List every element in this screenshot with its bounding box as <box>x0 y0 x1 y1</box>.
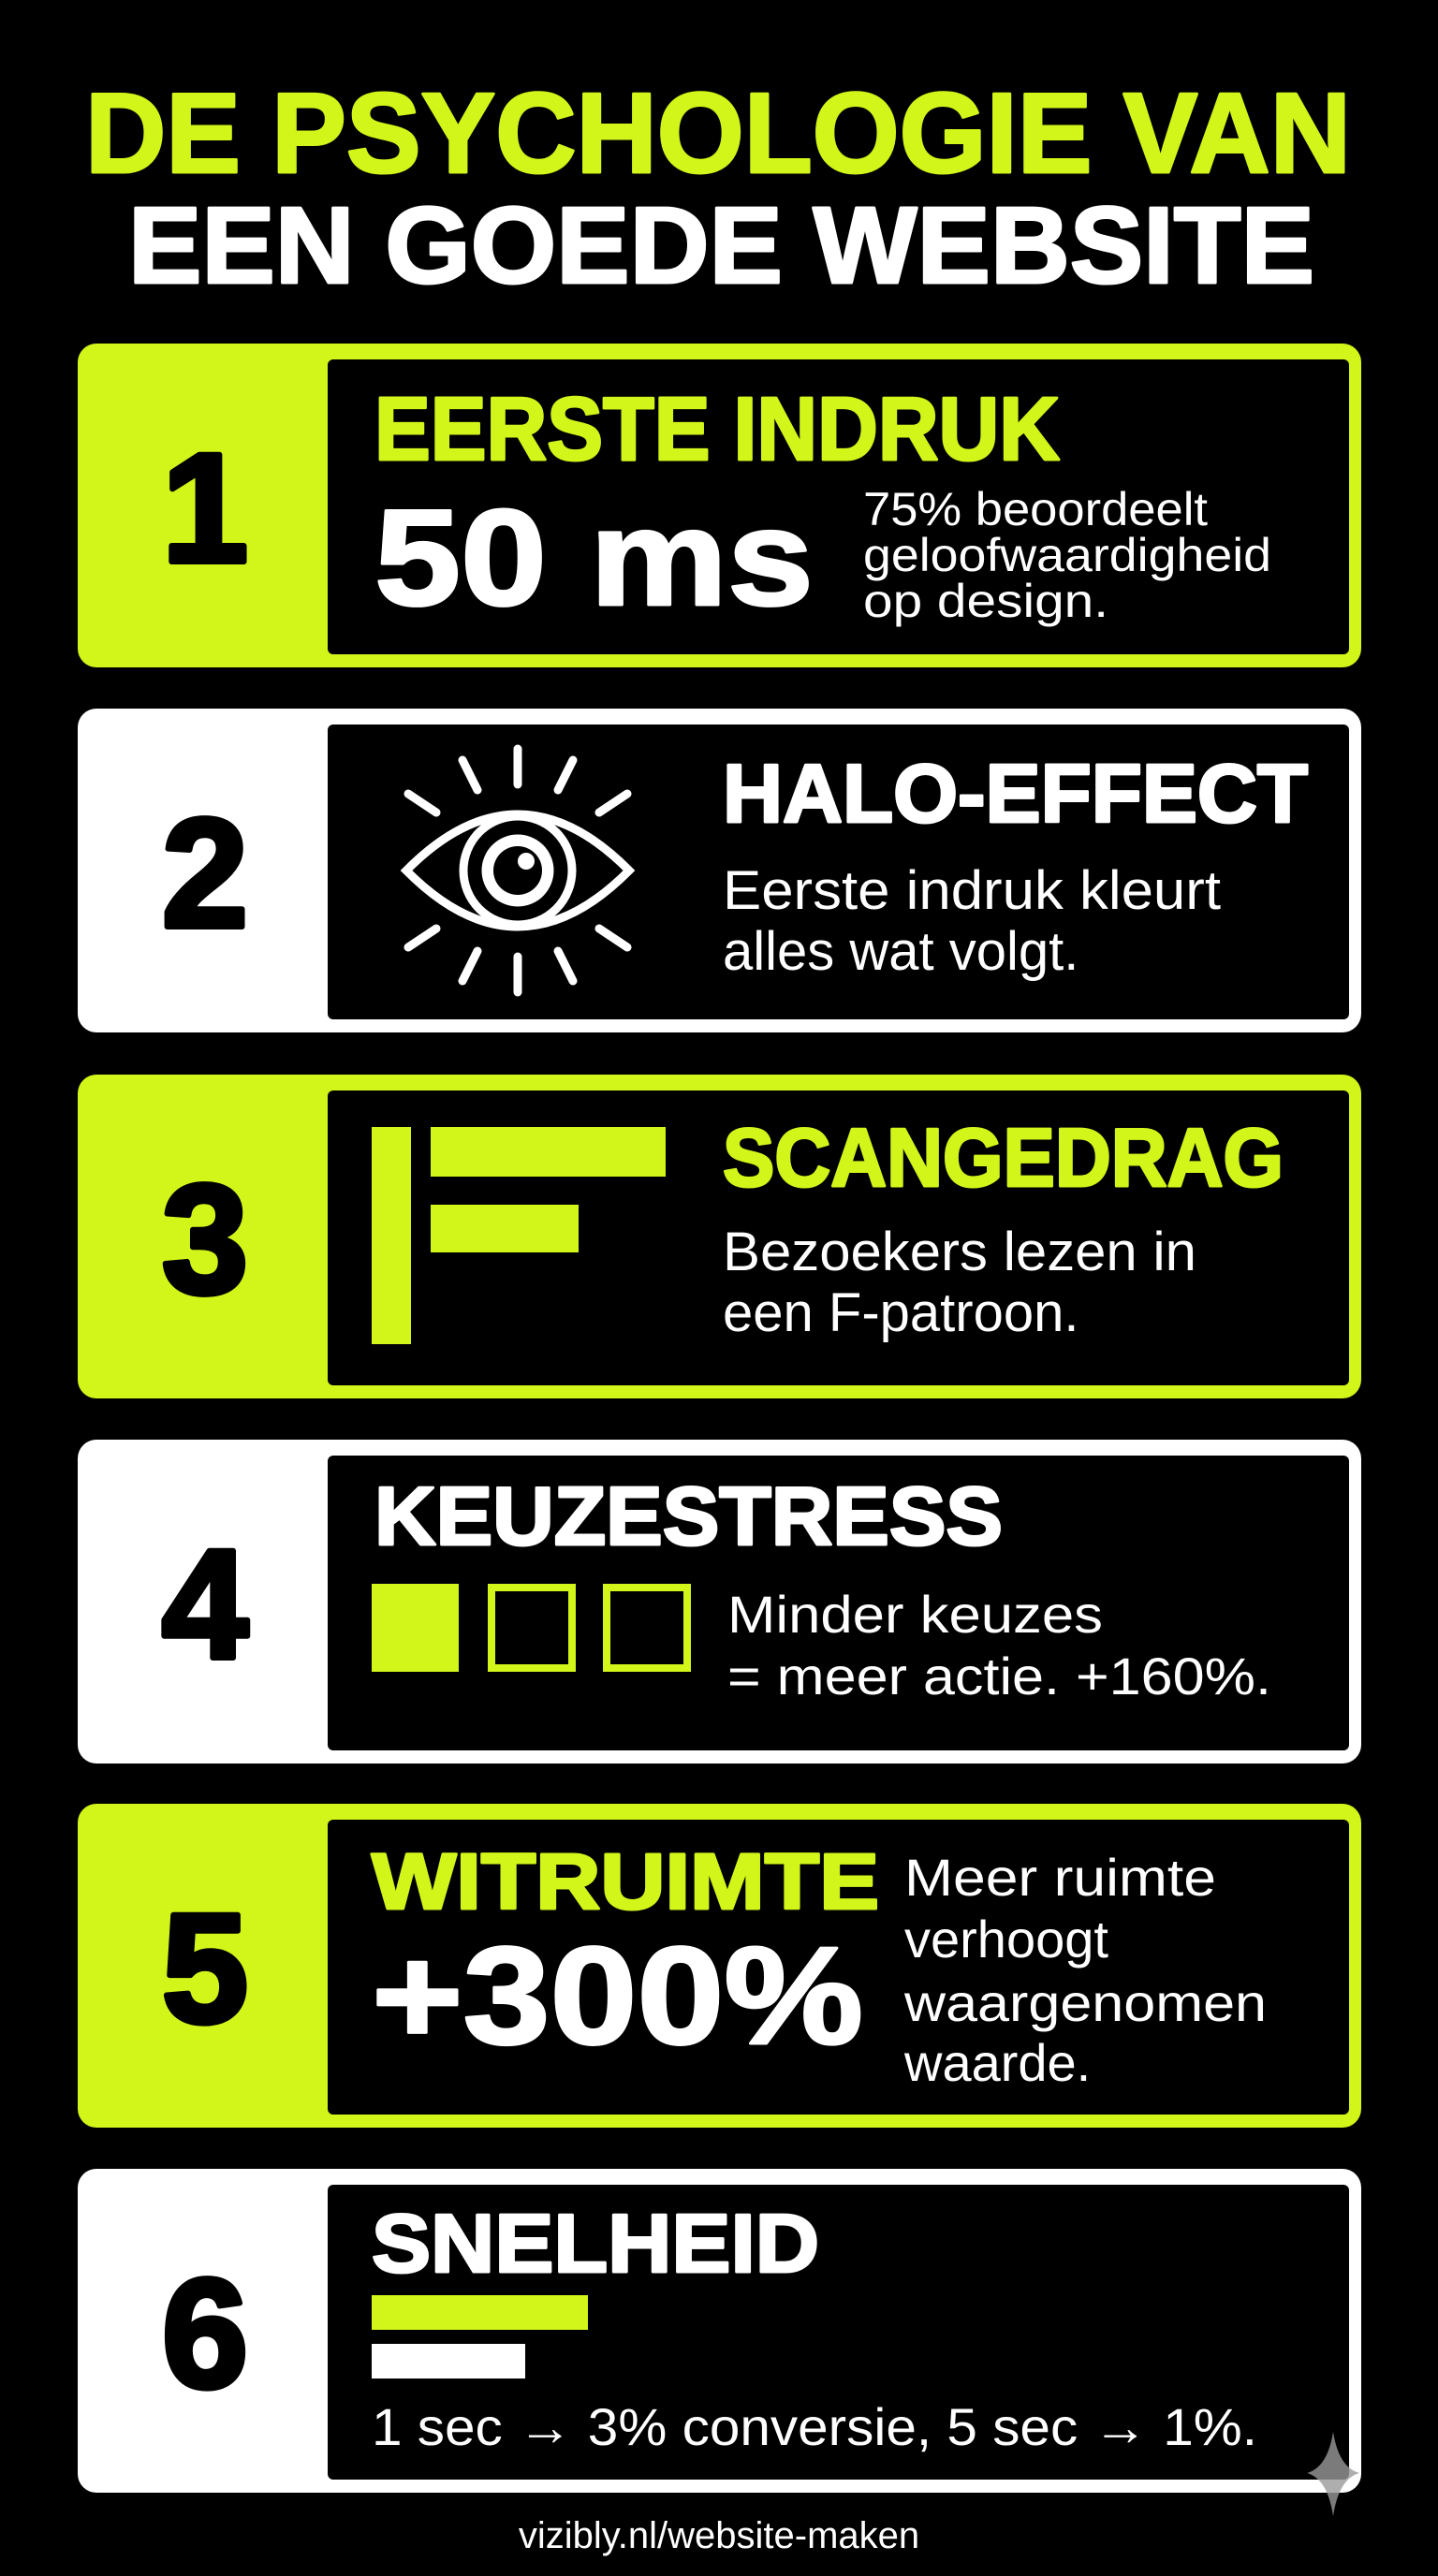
panel 3: scangedrag <box>78 1075 1361 1398</box>
description 5: Meer ruimte <box>904 1848 1216 1907</box>
heading: snelheid: SNELHEID <box>372 2197 819 2290</box>
stat: 50 ms: 50 ms <box>374 481 814 634</box>
panel 6: snelheid <box>78 2169 1361 2493</box>
panel 2: halo-effect <box>78 709 1361 1032</box>
number 6: 6 <box>162 2247 248 2421</box>
footer url: vizibly.nl/website-maken <box>519 2515 919 2556</box>
icon: eye <box>406 749 629 992</box>
heading: halo-effect: HALO-EFFECT <box>723 747 1308 840</box>
number 4: 4 <box>162 1518 248 1691</box>
number 5: 5 <box>162 1882 248 2056</box>
description 3: een F-patroon. <box>723 1282 1078 1343</box>
description 1 <box>863 483 1271 627</box>
number 1: 1 <box>162 422 248 595</box>
description 1: geloofwaardigheid <box>863 529 1271 581</box>
number 3: 3 <box>162 1153 248 1326</box>
description 5: verhoogt <box>904 1910 1108 1969</box>
panel 4: keuzestress <box>78 1440 1361 1764</box>
description 2: Eerste indruk kleurt <box>723 860 1221 921</box>
description 5: waarde. <box>903 2033 1091 2092</box>
icon: speed bars <box>372 2295 588 2378</box>
description 2: alles wat volgt. <box>723 921 1078 982</box>
description 6: 1 sec → 3% conversie, 5 sec → 1%. <box>372 2397 1257 2456</box>
heading: eerste indruk: EERSTE INDRUK <box>374 379 1060 479</box>
heading: keuzestress: KEUZESTRESS <box>374 1470 1003 1562</box>
title: EEN GOEDE WEBSITE <box>128 184 1314 306</box>
description 1: op design. <box>863 575 1108 627</box>
icon: sparkle <box>1307 2432 1359 2516</box>
description 4: = meer actie. +160%. <box>727 1647 1271 1705</box>
number 2: 2 <box>162 787 248 960</box>
heading: witruimte: WITRUIMTE <box>372 1837 879 1925</box>
description 2 <box>723 860 1221 982</box>
title <box>85 69 1351 306</box>
description 4 <box>727 1585 1271 1705</box>
description 5: waargenomen <box>903 1973 1267 2032</box>
panel 1: eerste indruk <box>78 344 1361 667</box>
heading: scangedrag: SCANGEDRAG <box>723 1111 1284 1204</box>
description 3 <box>723 1222 1196 1343</box>
icon: F-pattern <box>372 1127 666 1344</box>
description 4: Minder keuzes <box>727 1585 1103 1644</box>
icon: choice boxes <box>372 1584 687 1672</box>
title: DE PSYCHOLOGIE VAN <box>85 69 1351 197</box>
description 5 <box>903 1848 1267 2092</box>
description 1: 75% beoordeelt <box>863 483 1208 535</box>
stat: +300%: +300% <box>372 1919 863 2073</box>
panel 5: witruimte <box>78 1804 1361 2128</box>
description 3: Bezoekers lezen in <box>723 1222 1196 1282</box>
